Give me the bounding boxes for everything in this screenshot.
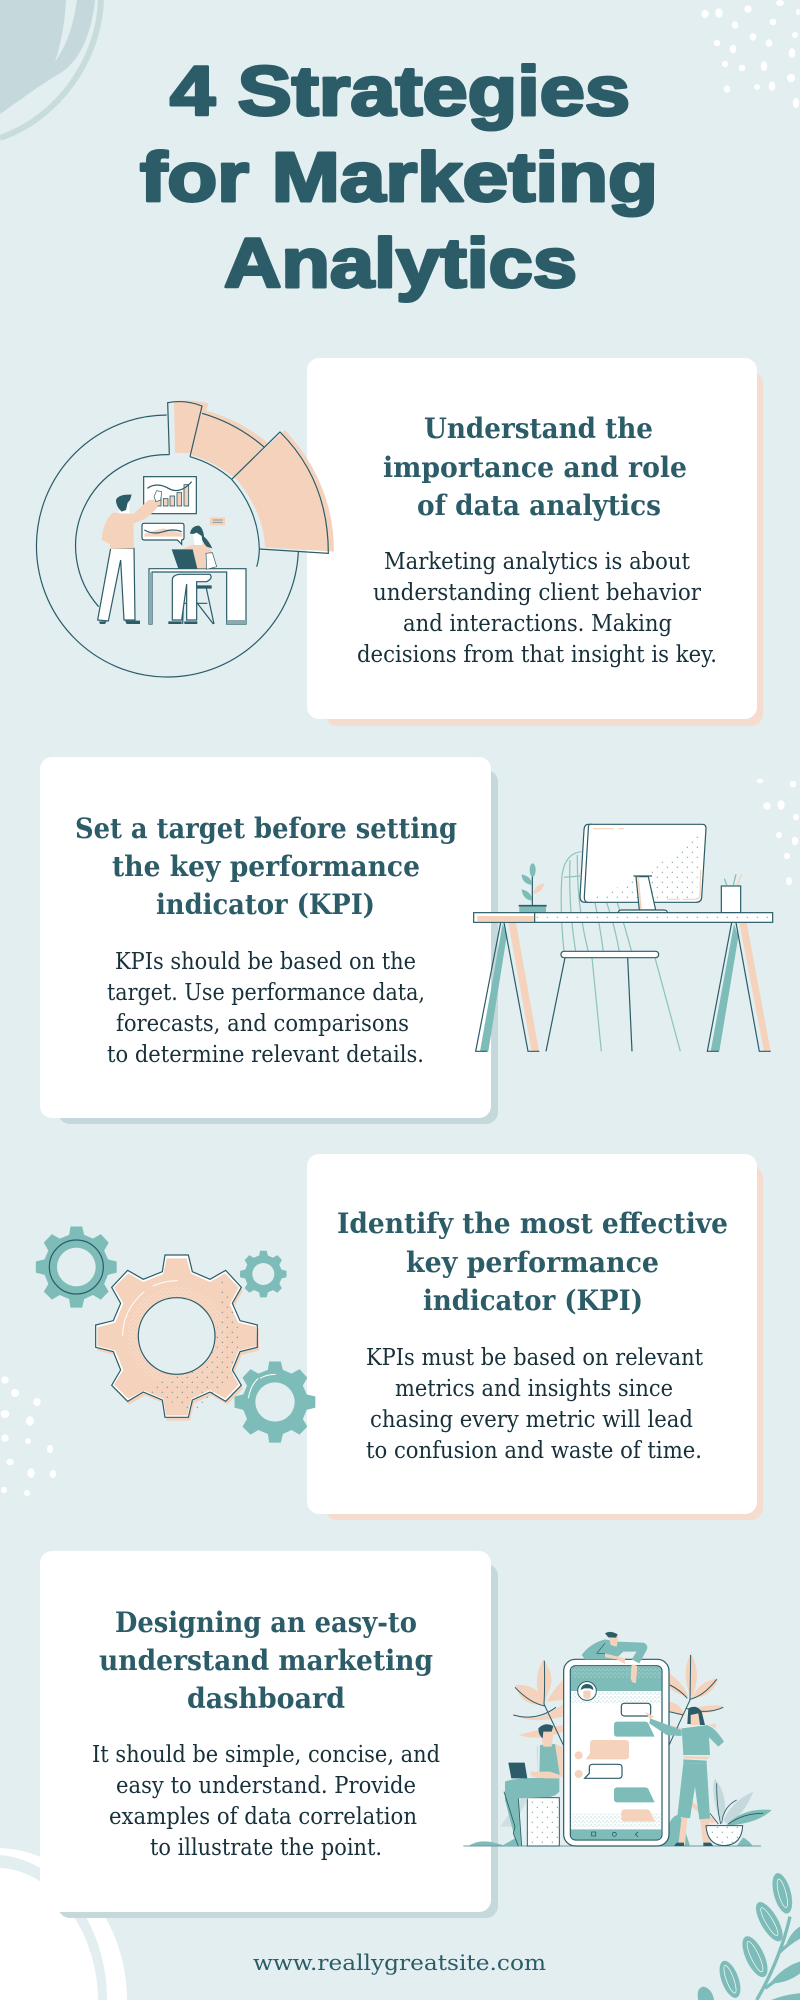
illustration: people around a phone [463,1632,772,1846]
body text: target: to determine relevant details. [107,1040,424,1068]
body text: identify: chasing every metric will lead [370,1405,693,1433]
panel: designing dashboard [40,1551,498,1918]
body text: dashboard: It should be simple, concise, and [92,1740,440,1768]
decoration: right-middle white dots [757,779,799,885]
heading: dashboard: understand marketing [99,1644,433,1677]
person standing right [645,1707,724,1846]
body text: understand: Marketing analytics is about [384,547,690,575]
potted plant [519,863,547,913]
title: Analytics [224,224,577,302]
heading: dashboard: Designing an easy-to [115,1606,417,1639]
peach tag [210,517,225,525]
title: 4 Strategies [170,52,630,130]
leaf stems [513,1655,723,1747]
man pointing [98,491,162,624]
body text: understand: and interactions. Making [403,609,672,637]
heading: target: the key performance [112,850,420,883]
chart board [144,477,196,514]
bowl plant [706,1778,772,1846]
body text: identify: to confusion and waste of time. [366,1436,702,1464]
desk [149,569,246,624]
chair [546,852,680,1051]
heading: target: Set a target before setting [75,812,457,845]
person on top of phone [582,1632,647,1683]
donut outlines [36,402,328,677]
title [140,52,658,302]
body text: understand: understanding client behavior [373,578,702,606]
heading: target: indicator (KPI) [156,888,375,921]
body text: dashboard [92,1740,440,1861]
person seated left [500,1724,563,1846]
heading: understand: importance and role [383,451,687,484]
panel: identify the most effective [307,1154,763,1520]
card background [307,1154,763,1520]
card background [40,1551,498,1918]
heading: identify: indicator (KPI) [423,1284,643,1317]
pencil cup [721,874,742,913]
body text: target: target. Use performance data, [107,978,425,1006]
body text: dashboard: to illustrate the point. [150,1833,382,1861]
heading: dashboard [99,1606,433,1715]
teal gear bottom-right [234,1361,315,1443]
heading: understand: of data analytics [417,489,661,522]
body text: dashboard: easy to understand. Provide [116,1771,416,1799]
table [474,913,773,1051]
illustration: desk with monitor [474,824,773,1051]
decoration: top-right white dots [701,0,800,108]
heading: understand: Understand the [424,412,653,445]
monitor [580,824,706,913]
body text: identify [366,1343,703,1464]
card background [40,757,498,1124]
body text: dashboard: examples of data correlation [109,1802,417,1830]
heading: identify: key performance [406,1246,659,1279]
body text: target: KPIs should be based on the [115,947,416,975]
small speech bubble with wave [142,523,184,544]
panel: understand the importance [307,358,763,726]
woman seated [168,526,217,624]
footer url: www.reallygreatsite.com [253,1951,546,1975]
heading: target [75,812,457,921]
card background [307,358,763,726]
heading: identify [337,1207,728,1317]
ground and mounds [463,1815,761,1846]
body text: identify: metrics and insights since [395,1374,673,1402]
decoration: left-middle white dots [1,1376,56,1496]
decoration: bottom-right leaf branch [698,1871,800,2000]
phone [564,1659,669,1846]
teal gear small [240,1251,286,1297]
body text: identify: KPIs must be based on relevant [366,1343,703,1371]
panel: set a target [40,757,498,1124]
body text: target: forecasts, and comparisons [116,1009,409,1037]
body text: target [107,947,425,1068]
peach segments [174,400,334,552]
chat bubbles [575,1703,655,1822]
title: for Marketing [140,138,658,216]
teal gear top-left [36,1226,117,1308]
big peach gear [96,1255,259,1421]
illustration: gears [36,1226,315,1443]
decoration: bottom-left white brush circle [0,1848,127,2000]
heading: understand [383,412,687,522]
avatar [578,1682,596,1700]
heading: identify: Identify the most effective [337,1207,728,1240]
body text: understand: decisions from that insight is key. [357,640,717,668]
body text: understand [357,547,717,668]
heading: dashboard: dashboard [187,1682,345,1715]
peach leaves [511,1653,723,1738]
illustration: analytics team in donut chart [36,400,334,677]
decoration: top-left brush circle [0,0,101,138]
